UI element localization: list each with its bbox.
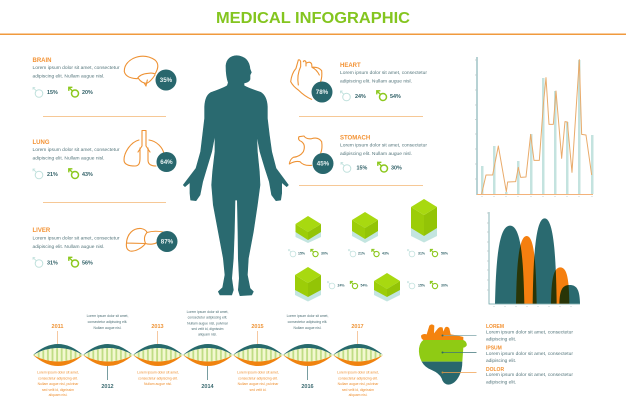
lung heading: LUNG xyxy=(32,140,50,146)
timeline text above xyxy=(87,310,328,336)
cube stats: 30% xyxy=(441,284,449,288)
stats: liver: 31% xyxy=(47,260,58,266)
heart bottom section xyxy=(422,362,462,385)
panel: brain xyxy=(32,56,176,97)
axis ticks xyxy=(487,213,571,307)
cube stats: 24% xyxy=(338,284,345,288)
heart diagram xyxy=(419,324,476,385)
lung text xyxy=(32,147,120,162)
timeline text below xyxy=(37,370,379,397)
circle: 35%: 35% xyxy=(160,77,173,84)
liver heading: LIVER xyxy=(32,228,51,234)
chart axes xyxy=(476,57,478,195)
stomach text xyxy=(340,142,427,157)
cube stats: 43% xyxy=(382,252,390,256)
timeline text below: Lorem ipsum dolor sit amet, xyxy=(37,370,79,374)
bar and line chart xyxy=(475,57,594,197)
heart legend: ipsum: adipiscing elit. xyxy=(486,358,516,364)
icon: lungs xyxy=(124,130,164,166)
timeline text below: aliquam nisi. xyxy=(49,393,67,397)
timeline text above: sed velit id, dignissim xyxy=(191,327,224,331)
heart legend: lorem: adipiscing elit. xyxy=(486,336,516,342)
stomach heading: STOMACH xyxy=(340,136,370,142)
isometric cube 5 xyxy=(374,273,400,302)
timeline text below: consectetur adipiscing elit. xyxy=(338,376,378,380)
cube stats: 54% xyxy=(360,284,368,288)
isometric cube 3 xyxy=(411,199,437,242)
timeline text above: consectetur adipiscing elit. xyxy=(288,320,327,324)
heart text: Lorem ipsum dolor sit amet, consectetur xyxy=(340,70,427,76)
stomach text: Lorem ipsum dolor sit amet, consectetur xyxy=(340,142,427,148)
chart axes xyxy=(489,212,580,304)
area hump chart xyxy=(487,212,580,307)
liver text xyxy=(32,236,120,250)
cube stats: 31% xyxy=(418,252,426,256)
icon: stomach xyxy=(289,136,322,165)
circle: 64%: 64% xyxy=(160,159,173,166)
heart legend: lorem xyxy=(486,324,573,342)
timeline text below: sed velit id, dignissim xyxy=(342,388,374,392)
stats: stomach: 15% xyxy=(356,166,367,172)
isometric cube 4 xyxy=(295,267,321,302)
timeline text below: Lorem ipsum dolor sit amet, xyxy=(137,370,179,374)
timeline text below: Nullam augue nisl, pulvinar xyxy=(238,382,279,386)
panel: stomach xyxy=(289,136,427,174)
circle: 45%: 45% xyxy=(317,161,330,168)
isometric cube 1 xyxy=(296,216,321,243)
heart middle section xyxy=(419,340,467,362)
circle: 87% xyxy=(156,231,178,252)
stats: heart xyxy=(340,91,401,101)
timeline text below: Lorem ipsum dolor sit amet, xyxy=(237,370,279,374)
heart legend: ipsum xyxy=(486,346,573,364)
heart legend: dolor: Lorem ipsum dolor sit amet, consectetur xyxy=(486,372,573,378)
stats: heart: 54% xyxy=(390,94,401,100)
liver text: Lorem ipsum dolor sit amet, consectetur xyxy=(32,236,120,242)
timeline text above: consectetur adipiscing elit. xyxy=(88,320,127,324)
year labels: 2013 xyxy=(151,324,164,330)
circle: 87%: 87% xyxy=(161,239,174,246)
panel: heart xyxy=(291,60,427,102)
lung text: adipiscing elit. Nullam augue nisl. xyxy=(32,156,104,162)
stats: lung: 43% xyxy=(82,172,93,178)
circle: 78%: 78% xyxy=(316,89,329,96)
timeline text below: Lorem ipsum dolor sit amet, xyxy=(337,370,379,374)
year labels: 2012 xyxy=(101,384,114,390)
callout lines xyxy=(442,334,476,336)
heart top section xyxy=(421,324,463,340)
icon: liver xyxy=(126,228,163,251)
timeline text below: consectetur adipiscing elit. xyxy=(38,376,78,380)
timeline text below: Nullam augue nisl, pulvinar xyxy=(38,382,79,386)
timeline text below: consectetur adipiscing elit. xyxy=(238,376,278,380)
year labels: 2016 xyxy=(301,384,314,390)
brain text: Lorem ipsum dolor sit amet, consectetur xyxy=(32,65,120,71)
liver text: adipiscing elit. Nullam augue nisl. xyxy=(32,244,104,250)
stats: brain: 20% xyxy=(82,90,93,96)
timeline text above: Lorem ipsum dolor sit amet, xyxy=(187,310,228,314)
stats: liver: 56% xyxy=(82,260,93,266)
heart legend: ipsum: IPSUM xyxy=(486,346,502,352)
heart heading: HEART xyxy=(340,63,361,69)
year labels: 2011 xyxy=(52,324,63,330)
stats: brain: 15% xyxy=(47,90,58,96)
year labels xyxy=(52,324,364,390)
timeline text above: Nullam augue nisl. xyxy=(94,326,121,330)
cube stats: 15% xyxy=(418,284,426,288)
stats: heart: 24% xyxy=(355,94,366,100)
bars xyxy=(481,60,594,194)
cube stats: 21% xyxy=(358,252,366,256)
stomach text: adipiscing elit. Nullam augue nisl. xyxy=(340,151,412,157)
circle: 64% xyxy=(156,152,176,172)
brain heading: BRAIN xyxy=(32,58,52,64)
isometric cube 2 xyxy=(352,212,378,243)
stats: lung xyxy=(33,169,93,179)
heart legend: lorem: LOREM xyxy=(486,324,504,330)
timeline text below: Nullam augue nisl, pulvinar xyxy=(338,382,379,386)
heart text xyxy=(340,70,427,84)
stats: lung: 21% xyxy=(47,172,58,178)
timeline text below: sed velit id. xyxy=(250,388,267,392)
axis ticks xyxy=(475,60,592,197)
humps xyxy=(495,218,580,304)
human body silhouette xyxy=(183,56,288,296)
heart legend: dolor xyxy=(486,367,573,386)
cube stats: 56% xyxy=(441,252,449,256)
panel: liver xyxy=(32,228,178,267)
heart legend: ipsum: Lorem ipsum dolor sit amet, consectetur xyxy=(486,351,573,357)
brain text: adipiscing elit. Nullam augue nisl. xyxy=(32,74,104,80)
heart text: adipiscing elit. Nullam augue nisl. xyxy=(340,78,412,84)
timeline text below: Nullam augue nisl. xyxy=(144,382,172,386)
timeline text above: Lorem ipsum dolor sit amet, xyxy=(87,314,128,318)
year labels: 2014 xyxy=(201,384,215,390)
timeline text below: aliquam nisi. xyxy=(349,393,367,397)
icon: brain xyxy=(124,56,158,86)
DNA strand xyxy=(33,344,383,366)
line series xyxy=(482,60,592,194)
timeline text above: Nullam augue nisl, pulvinar xyxy=(187,322,229,326)
timeline text above: aliquam nisi. xyxy=(198,332,217,336)
stats: brain xyxy=(33,87,93,97)
timeline text below: sed velit id, dignissim xyxy=(42,388,74,392)
heart legend: dolor: DOLOR xyxy=(486,367,504,373)
timeline xyxy=(33,310,383,397)
connector lines xyxy=(58,331,358,380)
icon: heart xyxy=(291,60,322,99)
brain text xyxy=(32,65,120,80)
heart legend: dolor: adipiscing elit. xyxy=(486,380,516,386)
timeline text below: consectetur adipiscing elit. xyxy=(138,376,178,380)
stats: liver xyxy=(33,257,93,267)
panel: lung xyxy=(32,130,176,179)
stats: stomach xyxy=(341,162,402,172)
lung text: Lorem ipsum dolor sit amet, consectetur xyxy=(32,147,120,153)
timeline text above: Nullam augue nisl. xyxy=(294,326,321,330)
year labels: 2017 xyxy=(351,324,364,330)
title: MEDICAL INFOGRAPHIC xyxy=(216,10,410,27)
heart legend: lorem: Lorem ipsum dolor sit amet, consectetur xyxy=(486,330,573,336)
circle: 35% xyxy=(156,70,176,90)
cube stats: 15% xyxy=(298,252,306,256)
timeline text above: Lorem ipsum dolor sit amet, xyxy=(287,314,328,318)
stats: stomach: 30% xyxy=(391,166,402,172)
header rule xyxy=(0,34,626,35)
cube stats: 30% xyxy=(321,252,329,256)
cube stats xyxy=(288,249,449,289)
year labels: 2015 xyxy=(251,324,264,330)
timeline text above: consectetur adipiscing elit. xyxy=(188,316,227,320)
